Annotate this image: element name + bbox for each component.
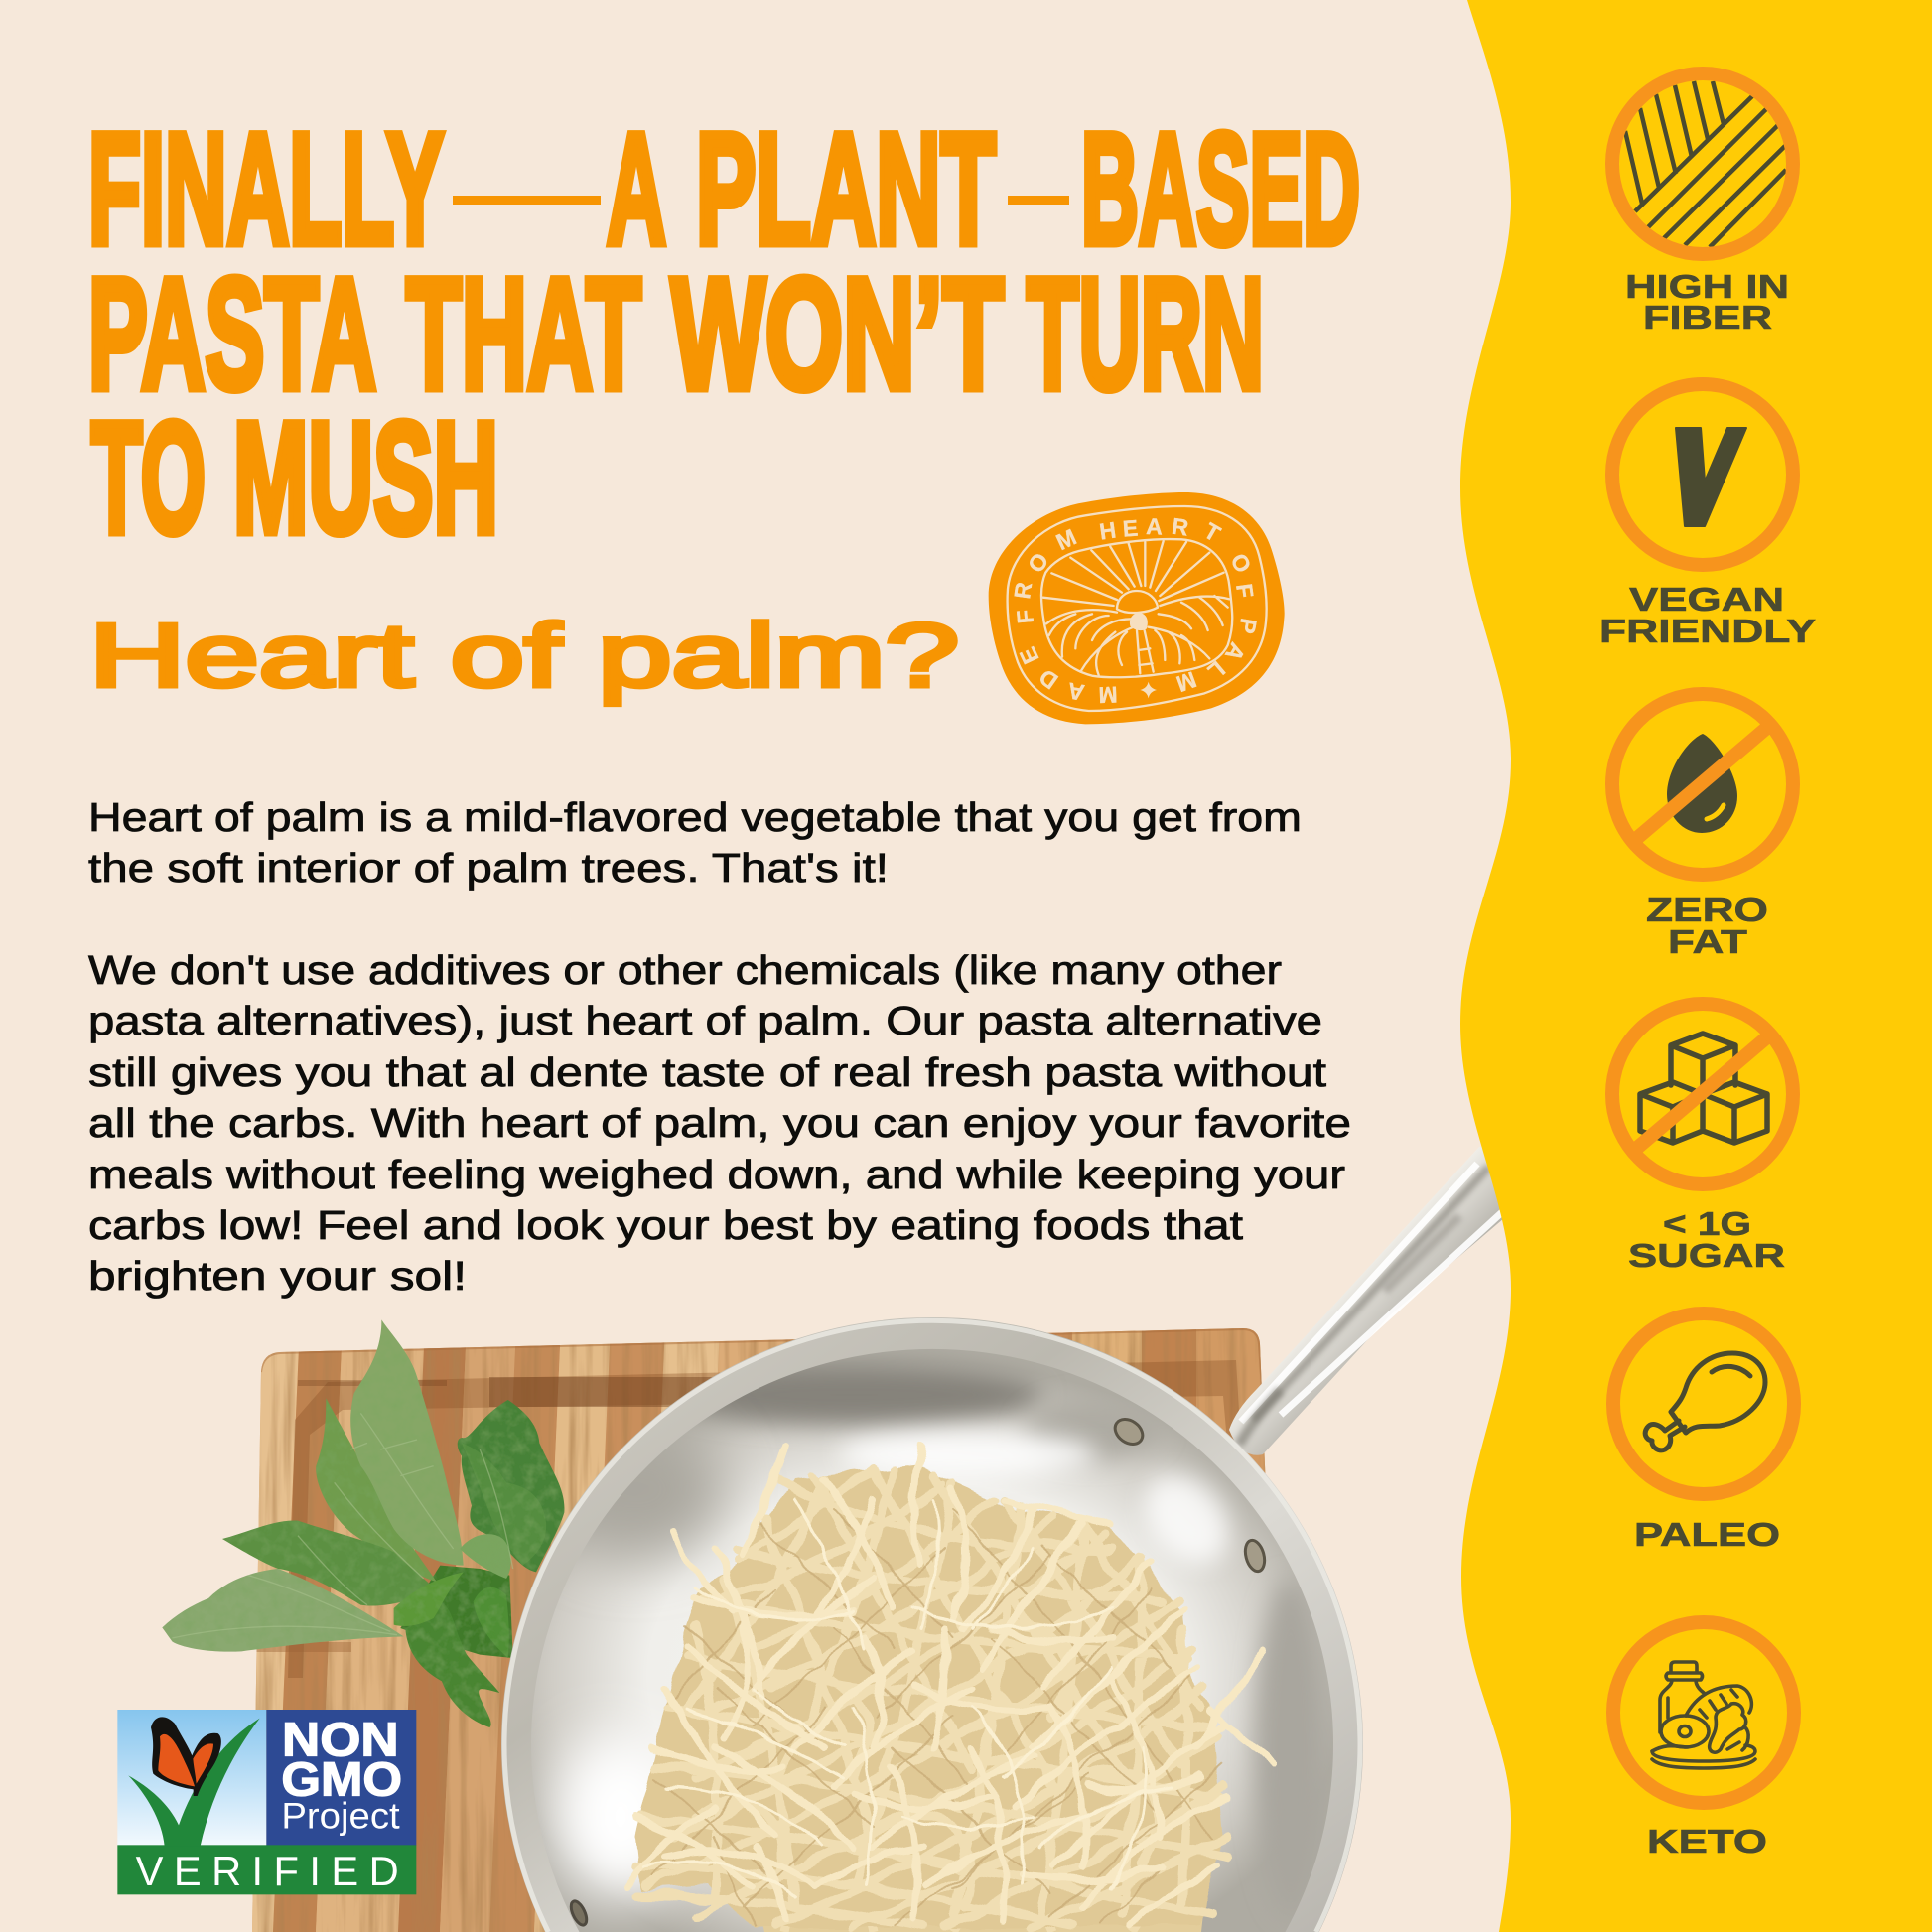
title: TO [91,389,206,566]
badge ring text: HEART [1098,513,1225,547]
butterfly [151,1717,221,1796]
badge: made from heart of palm [989,492,1285,724]
label: high in fiber: HIGH IN [1625,268,1789,305]
title: MUSH [233,389,498,566]
body text: We don't use additives or other chemicals (like many other [88,947,1282,993]
body text: the soft interior of palm trees. That's it! [88,845,889,891]
photo: steel pan [501,1317,1363,1932]
badge ring text: OF [1225,549,1259,600]
title: FINALLY [88,100,444,277]
title: WON’T [671,245,1004,422]
title: TURN [1027,245,1264,422]
icon: paleo [1613,1313,1794,1494]
body text: carbs low! Feel and look your best by eating foods that [88,1202,1244,1248]
title: THAT [406,245,641,422]
logo: Non-GMO Project Verified: GMO [281,1752,402,1806]
body text: brighten your sol! [88,1253,467,1299]
logo: Non-GMO Project Verified: VERIFIED [136,1848,399,1894]
label: high in fiber: FIBER [1643,299,1772,336]
label: zero fat: FAT [1668,923,1747,960]
logo: Non-GMO Project Verified [117,1710,416,1894]
badge body [989,492,1285,724]
badge ring text: FROM [1009,524,1080,624]
body text: Heart of palm is a mild-flavored vegetable that you get from [88,794,1302,840]
icon: low sugar [1612,1004,1793,1184]
label: low sugar: < 1G [1663,1205,1751,1242]
title: A [607,100,666,277]
logo: Non-GMO Project Verified: NON [282,1713,399,1766]
icon: zero fat [1612,694,1793,875]
green check [128,1719,260,1846]
title: BASED [1081,100,1360,277]
label: vegan friendly [1599,581,1816,649]
label: vegan friendly: VEGAN [1629,581,1784,618]
body text: still gives you that al dente taste of real fresh pasta without [88,1049,1327,1095]
label: vegan friendly: FRIENDLY [1599,613,1816,649]
title [88,100,1360,566]
title: PLANT [696,100,996,277]
badge ring text: MADE [1014,643,1118,708]
photo: basil leaves [162,1319,564,1727]
label: keto: KETO [1647,1823,1767,1860]
photo: heart of palm noodles [625,1445,1277,1932]
label: paleo: PALEO [1634,1516,1780,1553]
pan shading [546,1365,1326,1916]
badge ring text [1009,513,1262,708]
icon: keto [1613,1622,1794,1803]
photo: wooden cutting board [252,1325,1266,1932]
body text: pasta alternatives), just heart of palm. Our pasta alternative [88,998,1322,1043]
label: high in fiber [1625,268,1789,336]
icon: vegan friendly [1612,384,1793,565]
body text: meals without feeling weighed down, and while keeping your [88,1152,1345,1197]
title: PASTA [88,245,376,422]
label: low sugar: SUGAR [1628,1237,1785,1274]
badge star [1140,682,1157,698]
juice groove [288,1360,1243,1678]
label: zero fat: ZERO [1646,892,1768,928]
photo: pan handle [1229,1142,1524,1455]
pan rivets [1110,1414,1148,1449]
basil leaf veins [172,1413,513,1638]
subheading: Heart of palm? [89,607,959,706]
yellow wavy side panel [1460,0,1932,1932]
label: zero fat [1646,892,1768,960]
icon: high in fiber [1612,73,1793,254]
body text: all the carbs. With heart of palm, you can enjoy your favorite [88,1100,1351,1146]
logo: Non-GMO Project Verified: Project [281,1795,400,1837]
body text [88,794,1351,1299]
badge ring text: PALM [1173,617,1262,697]
label: low sugar [1628,1205,1785,1274]
